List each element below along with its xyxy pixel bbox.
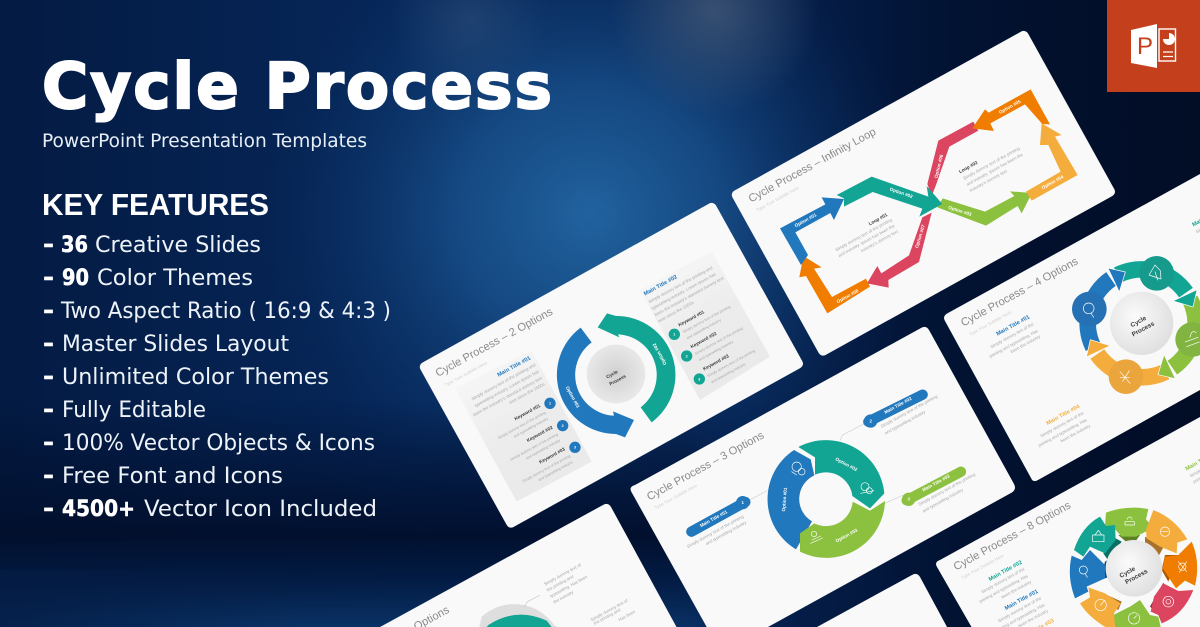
panel: slide partial options: the printing and <box>593 607 622 626</box>
panel: slide 8 options: Simply dummy text of the <box>980 566 1026 594</box>
panel: slide 8 options: Type Your Subtitle Here <box>960 553 1005 580</box>
chart: 3 options donut: Option #01 <box>781 487 788 512</box>
chart: 8 options wheel: Cycle <box>1119 565 1137 580</box>
panel: left text block: 3 <box>574 446 576 450</box>
panel: slide 4 options: Type Your Subtitle Here <box>968 309 1013 337</box>
feature: 90 color themes: 90 <box>62 266 89 291</box>
feature: unlimited color themes: Unlimited Color Themes <box>62 365 329 390</box>
feature: fully editable: - <box>43 398 54 423</box>
panel: slide 4 options: Main Title #01 <box>996 314 1031 338</box>
panel: left text block: ever since the 1500s <box>508 381 545 405</box>
panel: left text block: Simply dummy text of the printing and <box>471 362 537 401</box>
title: Cycle Process <box>42 50 552 123</box>
feature: vector objects: 100% Vector Objects & Icons <box>62 431 375 456</box>
chart: 3 options donut: Option #03 <box>835 527 859 544</box>
panel: slide 4 options: Simply dummy text of the <box>1039 410 1085 438</box>
icon: powerpoint badge <box>1107 0 1200 92</box>
panel: right text block: and typesetting industry <box>686 318 722 340</box>
panel: slide partial options: Has been <box>617 609 637 622</box>
chart: 4 options cycle ring <box>1072 256 1200 394</box>
panel: slide partial options: typesetting. Has been <box>549 574 589 599</box>
panel: left text block: Keyword #02 <box>526 425 554 443</box>
chart: infinity loop arrows: Option #04 <box>1041 174 1065 190</box>
feature: unlimited color themes: - <box>43 365 54 390</box>
panel: left text block: and typesetting industry <box>538 460 574 482</box>
panel: right text block: 1 <box>673 333 675 337</box>
feature: 36 creative slides: Creative Slides <box>95 233 261 258</box>
panel: slide partial options: Simply dummy text of <box>590 598 629 622</box>
callout: main title 02 <box>864 393 939 436</box>
panel: left text block: 2 <box>562 424 564 428</box>
panel: right text block: Simply dummy text of the printing <box>694 326 744 356</box>
chart: infinity loop arrows: Option #08 <box>836 288 860 304</box>
features list <box>43 233 391 522</box>
feature: 4500+ icons: 4500+ <box>62 497 135 522</box>
callout: main title 03: 3 <box>907 497 910 502</box>
icons: wheel pictograms <box>1079 517 1187 624</box>
chart: infinity loop arrows <box>780 89 1078 313</box>
text block: loop 02 <box>958 145 1024 193</box>
panel: slide 3 options <box>631 327 1015 627</box>
icon: powerpoint badge: P <box>1137 33 1153 60</box>
chart: 2 options cycle: Cycle <box>605 369 619 380</box>
panel: right text block: Simply dummy text of the printing <box>682 305 731 334</box>
panel: left text block: and typesetting industry <box>513 417 549 439</box>
panel: left text block: Keyword #03 <box>538 446 566 465</box>
callout: main title 03 <box>902 471 976 514</box>
heading: key features: KEY FEATURES <box>42 187 269 222</box>
chart: 2 options cycle <box>557 313 675 437</box>
panel: slide 4 options: Cycle Process – 4 Options <box>959 255 1081 329</box>
panel: right text block: Keyword #02 <box>690 331 718 349</box>
chart: infinity loop arrows: Option #03 <box>948 205 973 217</box>
feature: free font: Free Font and Icons <box>62 464 283 489</box>
panel: left text block: typesetting industry. Lorem Ipsum has <box>474 369 540 408</box>
panel: slide 8 options: Cycle Process – 8 Options <box>952 499 1073 573</box>
feature: aspect ratio: - <box>43 299 54 324</box>
feature: vector objects: - <box>43 431 54 456</box>
panel: slide 8 options <box>936 417 1200 627</box>
panel: right text block: 2 <box>686 354 688 358</box>
callout: main title 02: Simply dummy text of the printing <box>880 393 939 429</box>
feature: free font: - <box>43 464 54 489</box>
feature: 4500+ icons: - <box>43 497 54 522</box>
feature: 36 creative slides: - <box>43 233 54 258</box>
text block: loop 02: industry's dummy text <box>969 168 1008 193</box>
panel: slide 8 options: Simply dummy text of the <box>997 595 1043 623</box>
text block: loop 01 <box>834 212 900 258</box>
callout: main title 02: and typesetting industry <box>884 409 927 436</box>
node: green icon <box>1175 322 1200 357</box>
chart: infinity loop arrows: Option #07 <box>914 224 926 249</box>
panel: left text block: been the industry's standard dummy text <box>472 375 544 417</box>
panel: slide infinity loop: Type Your Subtitle Here <box>755 185 800 213</box>
callout: main title 03: and typesetting industry <box>921 487 965 514</box>
chart: 8 options wheel: Process <box>1124 568 1150 586</box>
text block: loop 02: Simply dummy text of the printing <box>962 145 1021 181</box>
panel: slide 4 options: Simply dummy text of the <box>989 321 1035 349</box>
panel: left text block <box>455 351 592 502</box>
node: teal icon <box>1139 256 1174 291</box>
text block: loop 02: and industry. Ipsum has been the <box>965 152 1024 187</box>
chart: 4 options cycle ring: Cycle <box>1130 315 1148 329</box>
chart: 8 options wheel <box>1070 508 1197 627</box>
text block: loop 01: industry's dummy text <box>860 228 900 253</box>
panel: slide 8 options: been the industry <box>1001 579 1033 599</box>
panel: slide 2 options: Type Your Subtitle Here <box>444 360 488 388</box>
panel: slide infinity loop <box>730 29 1117 357</box>
panel: left text block: Simply dummy text of the printing <box>509 432 559 462</box>
panel: left text block: Keyword #01 <box>514 403 541 421</box>
panel: right text block <box>640 252 770 400</box>
chart: infinity loop arrows: Option #05 <box>998 99 1022 115</box>
chart: 2 options cycle: Option #01 <box>565 385 581 409</box>
panel: slide partial options: Simply dummy text of <box>543 562 582 587</box>
feature: master slides: - <box>43 332 54 357</box>
chart: infinity loop arrows: Option #01 <box>794 212 818 228</box>
panel: slide partial options: the industry <box>552 589 575 605</box>
panel: slide partial options: the printing and <box>546 574 575 593</box>
feature: 36 creative slides: 36 <box>61 233 88 258</box>
panel: slide 2 options: Cycle Process – 2 Options <box>434 306 555 380</box>
panel: left text block: Main Title #01 <box>497 355 532 379</box>
panel: right text block: and typesetting industry <box>711 362 747 384</box>
panel: slide infinity loop: Cycle Process – Infinity Loop <box>747 126 878 205</box>
panel: slide 2 options <box>418 201 805 529</box>
callout: main title 01: 1 <box>741 500 744 505</box>
panel: left text block: 1 <box>549 402 551 406</box>
panel: right text block: typesetting industry. Lorem Ipsum has <box>650 272 717 311</box>
chart: 3 options donut <box>768 440 885 558</box>
panel: right text block: Keyword #03 <box>702 353 730 372</box>
panel: slide partial options <box>380 504 676 627</box>
feature: master slides: Master Slides Layout <box>62 332 289 357</box>
panel: right text block: been the industry's standard dummy text <box>654 275 725 317</box>
feature: fully editable: Fully Editable <box>62 398 206 423</box>
panel: slide 3 options: Type Your Subtitle Here <box>654 483 698 510</box>
node: orange icon <box>1109 359 1143 394</box>
panel: slide 4 options: been the industry <box>1060 423 1092 443</box>
panel: slide 4 options <box>944 174 1200 481</box>
chart: infinity loop arrows: Option #06 <box>933 154 944 179</box>
text block: loop 01: Loop #01 <box>868 212 888 226</box>
panel: right text block: and typesetting industry <box>698 340 734 362</box>
chart: 3 options donut: Option #02 <box>835 456 858 472</box>
panel: right text block: Keyword #01 <box>677 309 705 328</box>
callout: main title 01 <box>686 496 749 549</box>
feature: 4500+ icons <box>43 497 377 522</box>
text block: loop 01: and industry. Ipsum has been the <box>837 223 896 258</box>
callout: main title 01: and typesetting industry <box>705 519 748 546</box>
feature: aspect ratio: Two Aspect Ratio ( 16:9 & 4:3 ) <box>60 299 391 324</box>
panel: slide 4 options: printing and typesetting, Has <box>1037 417 1088 448</box>
chart: 2 options cycle: Process <box>608 373 627 387</box>
panel: slide 3 options: Cycle Process – 3 Options <box>645 429 767 503</box>
panel: left text block: and typesetting industry <box>525 438 561 460</box>
panel: right text block: 3 <box>698 377 700 381</box>
chart: 4 options cycle ring: Process <box>1131 320 1156 338</box>
panel: slide 8 options: Main Title #02 <box>988 560 1023 583</box>
panel: right text block: ever since the 1500s <box>657 300 695 324</box>
panel: right text block: Simply dummy text of the printing <box>707 349 756 378</box>
text block: loop 01: Simply dummy text of the printing <box>834 217 893 252</box>
feature: 90 color themes: - <box>43 266 54 291</box>
panel: right text block: Simply dummy text of the printing and <box>647 265 714 304</box>
panel: slide bottom middle <box>817 574 947 627</box>
callout: main title 03: Simply dummy text of the printing <box>917 471 976 507</box>
callout: main title 02: 2 <box>869 418 872 423</box>
feature: 4500+ icons: Vector Icon Included <box>144 497 377 522</box>
callout: main title 01: Main Title #01 <box>699 509 729 528</box>
chart: infinity loop arrows: Option #02 <box>889 187 914 199</box>
subtitle: PowerPoint Presentation Templates <box>42 130 367 152</box>
panel: right text block: Main Title #02 <box>643 274 678 297</box>
text block: loop 02: Loop #02 <box>958 160 979 174</box>
callout: main title 01: Simply dummy text of the printing <box>686 514 745 549</box>
callout: main title 02: Main Title #02 <box>883 396 913 415</box>
panel: slide 4 options: Main Title #04 <box>1046 403 1082 427</box>
feature: 90 color themes: Color Themes <box>97 266 253 291</box>
chart: 2 options cycle: Option #02 <box>651 342 668 366</box>
panel: slide 8 options: printing and typesetting, Has <box>978 573 1029 604</box>
callout: main title 03: Main Title #03 <box>921 473 951 493</box>
node: blue bulb icon <box>1072 292 1107 326</box>
panel: left text block: Simply dummy text of the printing <box>497 411 546 440</box>
panel: slide 4 options: been the industry <box>1010 333 1042 354</box>
panel: slide 8 options: Main Title #01 <box>1004 589 1039 612</box>
panel: slide 4 options: printing and typesetting, Has <box>988 328 1039 359</box>
panel: left text block: Simply dummy text of the printing <box>522 454 571 484</box>
